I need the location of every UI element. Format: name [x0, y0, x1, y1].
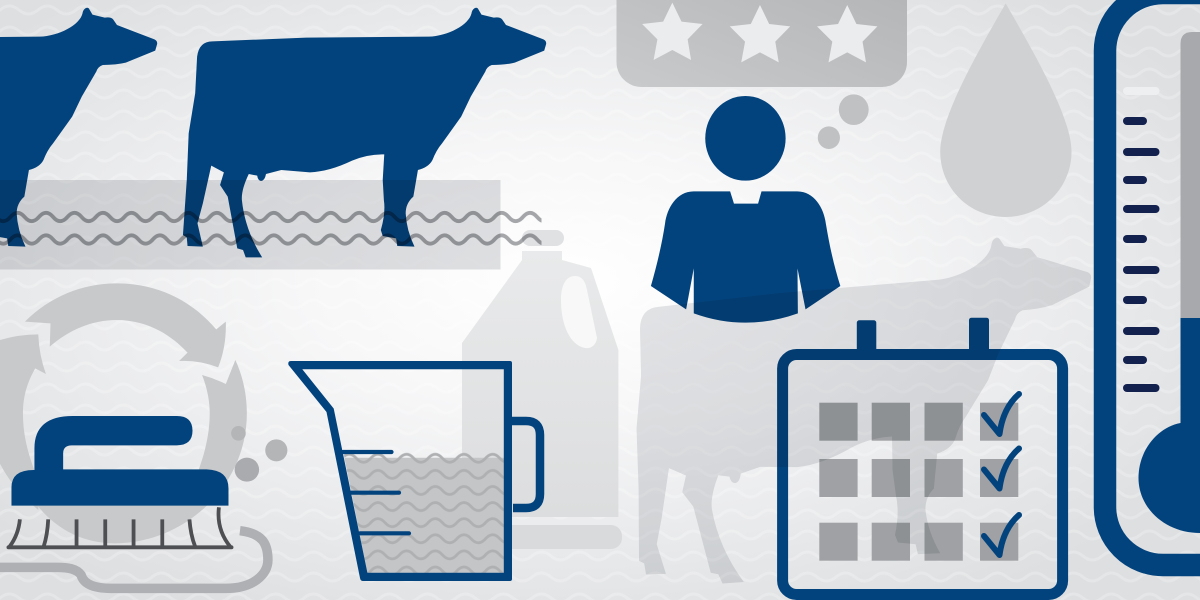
icon: blue cow left — [0, 8, 157, 257]
icon: calendar — [783, 318, 1063, 594]
icon: thought bubbles — [818, 94, 869, 149]
cup outline — [288, 361, 512, 581]
jug handle hole — [561, 276, 597, 348]
icon: grey cow silhouette — [617, 231, 1112, 590]
mercury column and bulb — [1138, 318, 1200, 533]
three stars — [642, 3, 877, 62]
bristles — [8, 507, 232, 547]
calendar frame — [783, 354, 1063, 594]
head — [705, 96, 786, 181]
icon: scrub brush — [8, 416, 232, 547]
icon: hose line — [0, 531, 268, 588]
check marks — [984, 394, 1019, 555]
grey band behind cows — [0, 180, 500, 270]
torso and arms — [651, 191, 840, 323]
jug body — [462, 251, 618, 517]
wave lines across band — [0, 208, 542, 248]
icon: person — [651, 96, 840, 323]
tick marks — [1123, 87, 1160, 392]
calendar rings — [857, 320, 876, 352]
jug cap — [522, 230, 564, 246]
brush body — [11, 416, 228, 506]
icon: milk jug — [462, 230, 622, 549]
water level — [344, 458, 504, 573]
icon: milk drop — [940, 3, 1072, 217]
icon: blue cow right — [183, 8, 546, 257]
cup measure lines — [343, 452, 409, 533]
icon: measuring cup — [288, 361, 540, 581]
jug base shelf — [500, 525, 622, 549]
cup handle — [512, 421, 540, 508]
icon: thermometer — [1105, 0, 1200, 565]
calendar grid squares — [819, 403, 1018, 561]
tube grey — [1180, 32, 1200, 318]
thermometer frame — [1105, 0, 1200, 565]
icon: thought panel with stars — [616, 0, 907, 87]
water waves — [340, 450, 510, 575]
icon: bubbles near brush — [231, 426, 287, 482]
icon: recycling arrows — [0, 283, 247, 543]
